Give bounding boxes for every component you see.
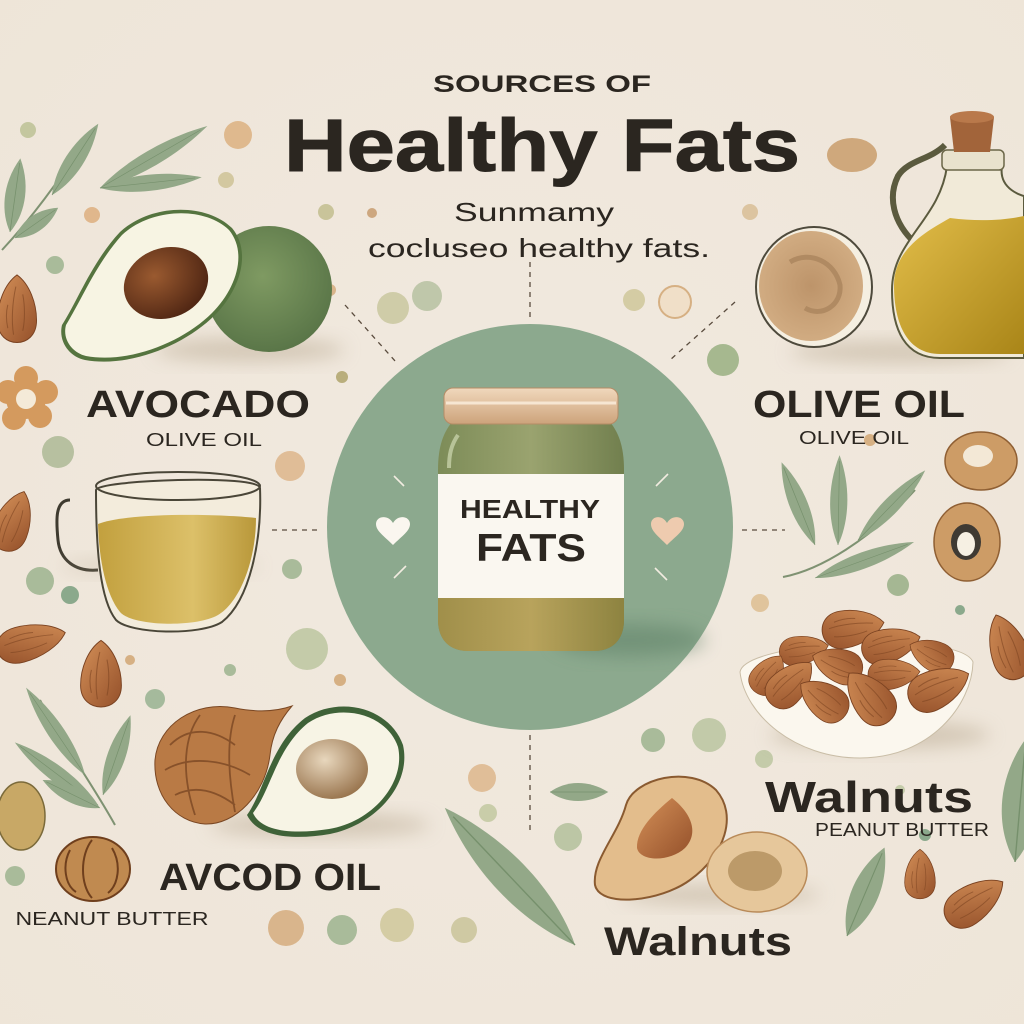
jar shadow — [555, 624, 705, 656]
icon: glass cup of oil — [57, 472, 260, 632]
decorative dots — [5, 121, 965, 946]
subtitle line one: Sunmamy — [454, 197, 614, 227]
panel: olive oil top right — [753, 111, 1024, 448]
icon: loose almonds — [0, 275, 1024, 936]
sparkle ticks — [394, 474, 668, 580]
panel: avocado top left — [61, 210, 345, 450]
almonds in bowl — [743, 604, 977, 734]
shadow — [155, 338, 345, 362]
green circle — [327, 324, 733, 730]
icon: sliced rings right — [934, 432, 1017, 581]
nut kernel — [637, 798, 692, 858]
dashed connector lines — [272, 262, 785, 830]
olive oil label: OLIVE OIL — [753, 384, 965, 426]
shadow — [790, 341, 1010, 363]
eyebrow heading: SOURCES OF — [433, 71, 651, 98]
avocado sublabel: OLIVE OIL — [146, 430, 262, 450]
nut half — [595, 777, 727, 900]
icon: white heart — [376, 517, 410, 545]
large walnut — [155, 706, 292, 824]
neanut butter sublabel: NEANUT BUTTER — [16, 909, 209, 929]
main heading: Healthy Fats — [284, 104, 800, 187]
avocado label: AVOCADO — [86, 384, 310, 426]
icon: peanut butter dish — [756, 227, 872, 347]
icon: jar: FATS — [476, 527, 586, 570]
cut avocado half — [61, 210, 242, 362]
icon: walnut half left — [0, 366, 58, 430]
icon: nut slice far left — [0, 782, 45, 850]
panel: bowl of almonds — [740, 604, 990, 840]
olive oil sublabel: OLIVE OIL — [799, 428, 909, 448]
panel: walnut and avocado bottom left — [16, 706, 430, 929]
avocado oil label: AVCOD OIL — [159, 857, 381, 899]
shadow — [210, 813, 430, 837]
icon: olive oil bottle — [892, 111, 1024, 358]
round nut slice — [707, 832, 807, 912]
avocado half — [247, 707, 404, 837]
panel: centre circle with jar — [327, 324, 733, 730]
avocado pit — [114, 235, 218, 331]
icon: small walnut — [56, 837, 130, 901]
avocado pit — [296, 739, 368, 799]
icon: peach heart — [651, 517, 684, 545]
shadow — [620, 885, 820, 905]
whole avocado — [206, 226, 332, 352]
icon: jar — [438, 388, 624, 651]
subtitle line two: cocluseo healthy fats. — [368, 233, 710, 263]
jar label text: HEALTHY — [460, 494, 600, 524]
walnuts label: Walnuts — [765, 773, 973, 822]
bowl — [740, 642, 973, 758]
panel: peanut butter nut bottom right — [595, 777, 820, 964]
title — [284, 71, 800, 263]
shadow — [770, 721, 990, 749]
peanut butter sublabel: PEANUT BUTTER — [815, 820, 989, 840]
walnuts label: Walnuts — [604, 920, 792, 964]
